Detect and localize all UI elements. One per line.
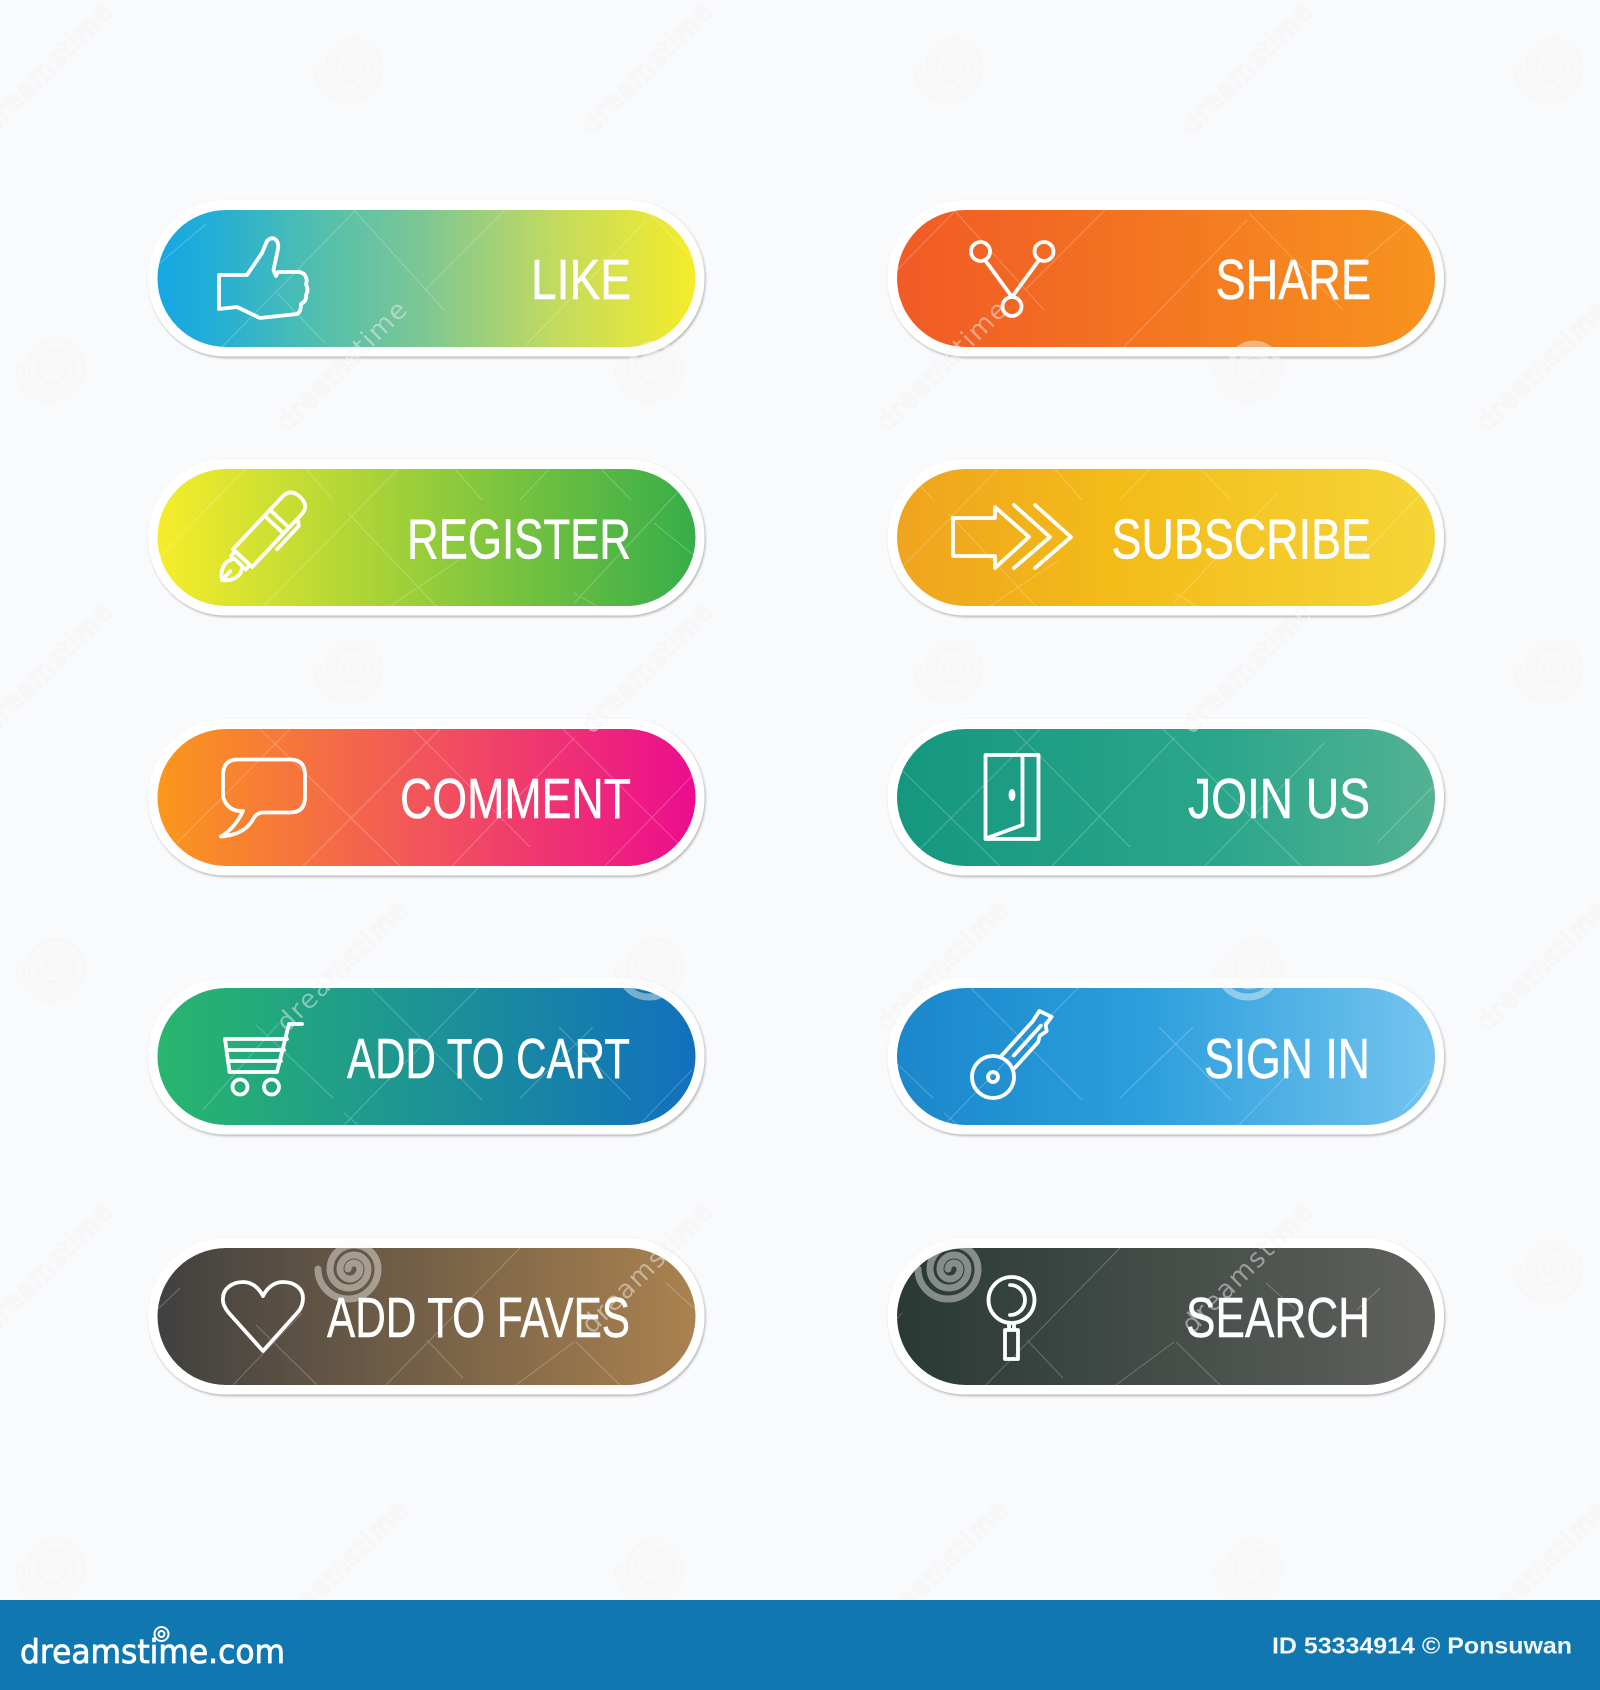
footer bar: [0, 1600, 1600, 1690]
watermark text: dreamstime: [576, 0, 719, 140]
label: register: REGISTER: [407, 508, 631, 572]
icon: key: [963, 1001, 1065, 1107]
label: subscribe: SUBSCRIBE: [1112, 508, 1371, 572]
icon: magnifier: [988, 1277, 1034, 1359]
button: join us: [888, 719, 1444, 876]
icon: thumbs up: [219, 238, 308, 318]
watermark text: dreamstime: [271, 895, 414, 1038]
label: add to faves: ADD TO FAVES: [327, 1286, 630, 1350]
button: sign in: [888, 978, 1444, 1134]
icon: share nodes: [971, 242, 1054, 316]
watermark text: dreamstime: [576, 597, 719, 740]
watermark text: dreamstime: [1176, 597, 1319, 740]
footer logo text: dreamstime.com: [20, 1632, 285, 1671]
label: share: SHARE: [1216, 248, 1371, 312]
button: share: [888, 200, 1444, 356]
button: like: [148, 200, 704, 356]
icon: arrows: [953, 505, 1071, 568]
button: subscribe: [888, 459, 1444, 616]
icon: speech bubble: [221, 760, 305, 836]
footer logo spiral: [154, 1627, 168, 1641]
watermark text: dreamstime: [871, 895, 1014, 1038]
button: add to cart: [148, 978, 704, 1134]
label: like: LIKE: [531, 248, 631, 312]
label: join us: JOIN US: [1188, 767, 1370, 831]
watermark text: dreamstime: [871, 295, 1014, 438]
watermark text: dreamstime: [576, 1197, 719, 1340]
icon: heart: [223, 1282, 303, 1351]
button: add to faves: [148, 1238, 704, 1394]
watermark text: dreamstime: [871, 1495, 1014, 1638]
button: search: [888, 1238, 1444, 1394]
label: add to cart: ADD TO CART: [347, 1027, 630, 1091]
label: sign in: SIGN IN: [1204, 1027, 1370, 1091]
button: register: [148, 459, 704, 616]
watermark text: dreamstime: [271, 295, 414, 438]
icon: shopping cart: [225, 1024, 302, 1094]
icon: door: [986, 755, 1038, 839]
image id and credit: ID 53334914 © Ponsuwan: [1272, 1632, 1572, 1658]
watermark text: dreamstime: [1176, 0, 1319, 140]
watermark lattice lines: [158, 210, 1434, 1385]
button: comment: [148, 719, 704, 876]
watermark text: dreamstime: [1176, 1197, 1319, 1340]
icon: pen: [213, 488, 314, 593]
label: comment: COMMENT: [400, 767, 631, 831]
watermark text: dreamstime: [271, 1495, 414, 1638]
label: search: SEARCH: [1186, 1286, 1370, 1350]
